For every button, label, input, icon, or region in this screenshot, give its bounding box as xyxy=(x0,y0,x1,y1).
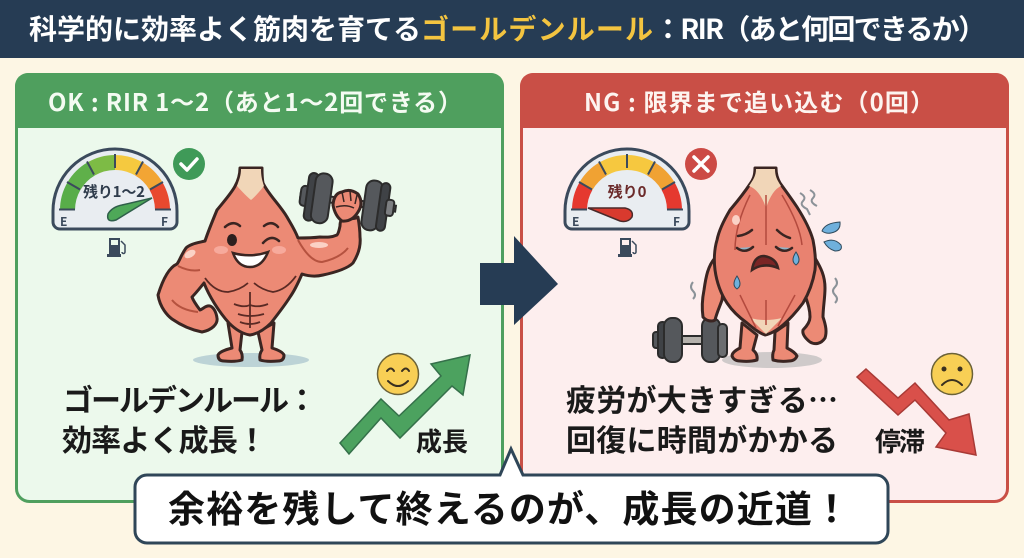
main text: OK xyxy=(62,376,317,460)
gauge needle xyxy=(588,208,632,222)
strong muscle mascot xyxy=(158,168,399,367)
gauge: remaining 0 xyxy=(565,149,689,230)
face xyxy=(227,234,237,246)
main text: OK: 効率よく成長！ xyxy=(62,416,267,460)
main text: NG: 回復に時間がかかる xyxy=(566,416,838,460)
label: growth: 成長 xyxy=(416,422,468,459)
title banner: 科学的に効率よく筋肉を育てる xyxy=(29,8,421,48)
title banner xyxy=(0,0,1024,58)
center arrow xyxy=(480,236,558,325)
panel heading: OK: OK : RIR 1〜2（あと1〜2回できる） xyxy=(48,83,462,118)
icon: fuel pump xyxy=(618,238,636,257)
main text: NG xyxy=(566,376,838,460)
gauge: remaining 1-2: F xyxy=(161,213,168,230)
icon: cross badge xyxy=(685,148,717,180)
decline arrow xyxy=(857,369,976,455)
face xyxy=(738,230,790,238)
icon: sad face xyxy=(932,354,972,394)
panel: NG xyxy=(520,73,1009,502)
callout: 余裕を残して終えるのが、成長の近道！ xyxy=(168,479,850,533)
gauge: remaining 1-2: 残り1〜2 xyxy=(83,181,145,202)
gauge: remaining 1-2 xyxy=(53,149,177,230)
gauge: remaining 0: E xyxy=(572,213,579,230)
icon: check badge xyxy=(173,148,205,180)
gauge: remaining 0: F xyxy=(673,213,680,230)
panel heading: NG: NG : 限界まで追い込む（0回） xyxy=(584,83,934,118)
tendon xyxy=(749,169,781,208)
dumbbell on floor xyxy=(653,318,727,362)
muscle definition xyxy=(205,276,296,328)
icon: fuel pump xyxy=(107,238,125,257)
growth arrow xyxy=(340,355,470,454)
tired muscle mascot xyxy=(653,168,841,368)
main text: OK: ゴールデンルール： xyxy=(63,376,317,420)
panel: OK xyxy=(15,73,504,502)
label: stagnation: 停滞 xyxy=(875,422,925,459)
fist xyxy=(333,190,361,221)
icon: smiling face xyxy=(378,354,418,394)
main text: NG: 疲労が大きすぎる… xyxy=(566,376,838,420)
gauge: remaining 0: 残り0 xyxy=(608,181,647,202)
muscle fibres xyxy=(735,195,802,328)
tendon xyxy=(237,169,264,200)
dumbbell raised xyxy=(297,171,399,233)
title banner: ：RIR（あと何回できるか） xyxy=(654,8,986,48)
gauge needle xyxy=(108,198,152,221)
callout xyxy=(135,449,888,543)
gauge: remaining 1-2: E xyxy=(60,213,67,230)
title banner: ゴールデンルール xyxy=(421,8,653,48)
